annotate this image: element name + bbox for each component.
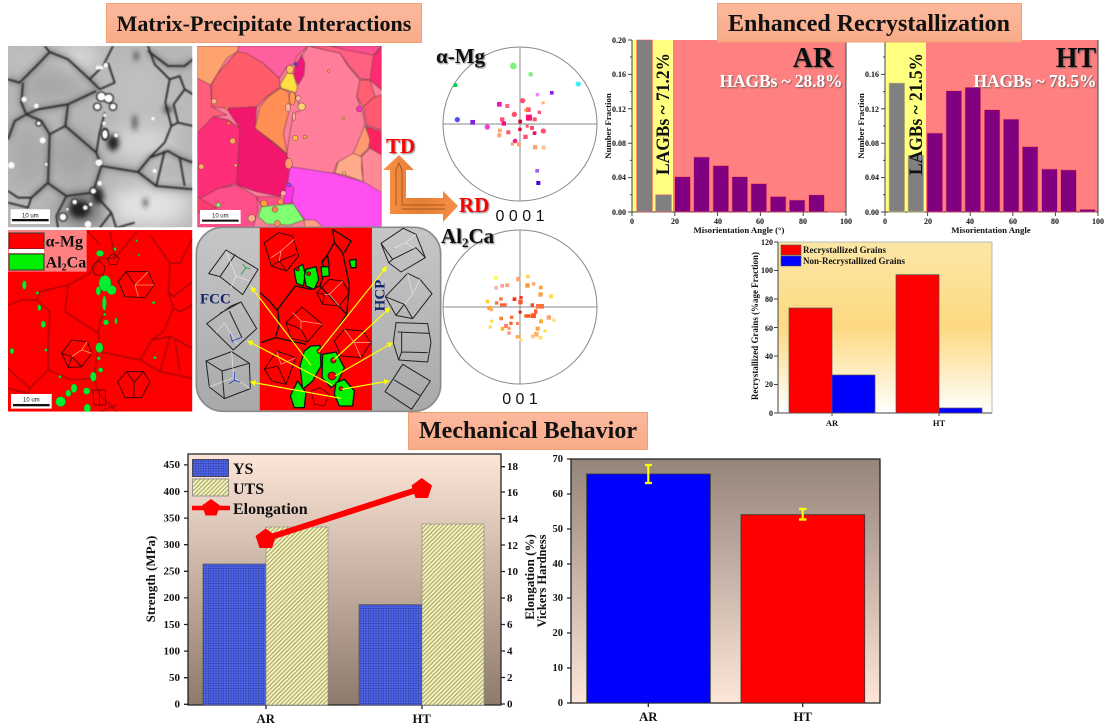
chart: Vickers hardness: HT bbox=[794, 710, 812, 724]
panel: SEM micrograph bbox=[6, 44, 195, 228]
chart: strength and elongation: 400 bbox=[164, 486, 180, 498]
chart: strength and elongation: 250 bbox=[164, 566, 180, 578]
legend: 2 bbox=[62, 262, 67, 273]
chart: strength and elongation: 100 bbox=[164, 646, 180, 658]
chart: misorientation HT: HT bbox=[1056, 43, 1097, 74]
chart: misorientation HT: 60 bbox=[1009, 217, 1017, 226]
panel: IPF orientation map bbox=[197, 46, 382, 227]
legend: Non-Recrystallized Grains bbox=[803, 256, 905, 266]
chart: Vickers hardness: 60 bbox=[552, 489, 563, 500]
title: Mechanical Behavior bbox=[408, 412, 648, 450]
error bars bbox=[645, 465, 806, 520]
chart: recrystallized grains: 40 bbox=[765, 352, 773, 361]
chart: recrystallized grains bbox=[750, 238, 992, 428]
chart: strength and elongation: 10 bbox=[507, 566, 518, 578]
chart: Vickers hardness: 0 bbox=[558, 698, 563, 709]
yellow arrows bbox=[248, 267, 393, 398]
scale bar: 10 um bbox=[23, 398, 40, 404]
chart: Vickers hardness: Vickers Hardness bbox=[535, 534, 549, 627]
chart: misorientation HT: 0.04 bbox=[865, 173, 879, 182]
label: FCC: FCC bbox=[200, 292, 231, 308]
title: Enhanced Recrystallization bbox=[718, 4, 1022, 42]
legend bbox=[8, 230, 87, 273]
TD RD axes arrows: RD bbox=[459, 193, 489, 217]
chart: misorientation AR: 20 bbox=[671, 217, 679, 226]
panel: crystal structure schematic bbox=[196, 227, 441, 411]
chart: misorientation HT: 0.00 bbox=[865, 208, 879, 217]
pole figure: alpha-Mg: 0 0 0 1 bbox=[496, 208, 545, 225]
chart: strength and elongation: 350 bbox=[164, 512, 180, 524]
chart: strength and elongation: 16 bbox=[507, 487, 518, 499]
chart: misorientation AR: AR bbox=[793, 43, 834, 74]
elongation line bbox=[256, 478, 432, 548]
chart: recrystallized grains: AR bbox=[826, 418, 839, 428]
chart: misorientation AR: 0.08 bbox=[612, 139, 626, 148]
chart: recrystallized grains: 20 bbox=[765, 380, 773, 389]
chart: recrystallized grains: Recrystallized Grains (%age Fraction) bbox=[750, 252, 760, 400]
chart: strength and elongation: 50 bbox=[169, 672, 180, 684]
title: Matrix-Precipitate Interactions: Matrix-Precipitate Interactions bbox=[117, 11, 412, 36]
legend: Al bbox=[46, 255, 62, 272]
chart: strength and elongation: HT bbox=[413, 712, 431, 726]
scale bar: 10 um bbox=[22, 213, 39, 219]
chart: strength and elongation: 14 bbox=[507, 514, 518, 526]
chart: Vickers hardness: 30 bbox=[552, 593, 563, 604]
TD RD axes arrows bbox=[383, 134, 489, 222]
crystal wireframes on red bbox=[264, 233, 371, 406]
scale bar bbox=[11, 394, 52, 409]
legend: Recrystallized Grains bbox=[803, 245, 886, 255]
chart: Vickers hardness: 40 bbox=[552, 559, 563, 570]
chart: misorientation AR: 80 bbox=[799, 217, 807, 226]
scale bar bbox=[200, 210, 241, 224]
pole figure: Al2Ca: 2 bbox=[462, 235, 468, 250]
panel: phase map bbox=[8, 230, 192, 413]
title: Matrix-Precipitate Interactions bbox=[106, 4, 422, 42]
chart: misorientation HT: LAGBs ~ 21.5% bbox=[907, 53, 927, 175]
chart: Vickers hardness bbox=[535, 454, 880, 724]
chart: recrystallized grains: HT bbox=[933, 418, 945, 428]
chart: misorientation AR: 0.12 bbox=[612, 105, 626, 114]
chart: misorientation AR: 0.20 bbox=[612, 36, 626, 45]
chart: recrystallized grains: 0 bbox=[769, 409, 773, 418]
chart: misorientation HT: 20 bbox=[924, 217, 932, 226]
chart: misorientation HT: 0.12 bbox=[865, 105, 879, 114]
legend: YS bbox=[233, 461, 254, 478]
chart: strength and elongation: 300 bbox=[164, 539, 180, 551]
pole figure: Al2Ca: Al bbox=[441, 224, 462, 248]
pole figure: alpha-Mg bbox=[436, 44, 597, 225]
chart: misorientation AR: 0.16 bbox=[612, 70, 626, 79]
pole figure: Al2Ca bbox=[441, 224, 597, 408]
chart: strength and elongation: 8 bbox=[507, 592, 513, 604]
chart: misorientation AR bbox=[603, 36, 852, 235]
legend: α-Mg bbox=[46, 233, 83, 250]
chart: misorientation HT: Misorientation Angle bbox=[951, 225, 1031, 235]
chart: recrystallized grains: 120 bbox=[761, 238, 773, 247]
chart: recrystallized grains: 80 bbox=[765, 295, 773, 304]
chart: misorientation HT: 0 bbox=[883, 217, 887, 226]
pole figure: Al2Ca: Ca bbox=[468, 224, 495, 248]
chart: strength and elongation: Elongation (%) bbox=[522, 534, 537, 620]
chart: recrystallized grains: 100 bbox=[761, 266, 773, 275]
title: Enhanced Recrystallization: Enhanced Recrystallization bbox=[728, 11, 1010, 37]
chart: strength and elongation: 12 bbox=[507, 540, 518, 552]
title: Mechanical Behavior: Mechanical Behavior bbox=[419, 418, 637, 444]
chart: misorientation AR: 60 bbox=[756, 217, 764, 226]
pole figure: Al2Ca: 0 0 1 bbox=[502, 391, 538, 408]
chart: misorientation HT: 80 bbox=[1051, 217, 1059, 226]
crystal wireframes on map bbox=[62, 253, 154, 405]
chart: recrystallized grains: 60 bbox=[765, 324, 773, 333]
chart: Vickers hardness: 50 bbox=[552, 524, 563, 535]
chart: strength and elongation: 6 bbox=[507, 619, 513, 631]
chart: misorientation AR: 0.00 bbox=[612, 208, 626, 217]
chart: strength and elongation: Strength (MPa) bbox=[143, 536, 158, 622]
chart: Vickers hardness: 10 bbox=[552, 663, 563, 674]
legend: Elongation bbox=[233, 501, 308, 518]
chart: misorientation HT: HAGBs ~ 78.5% bbox=[974, 71, 1096, 91]
HCP prisms bbox=[381, 228, 432, 409]
legend: Ca bbox=[67, 255, 86, 272]
pole figure: alpha-Mg: α-Mg bbox=[436, 44, 486, 68]
chart: strength and elongation: 200 bbox=[164, 592, 180, 604]
chart: misorientation AR: 0 bbox=[630, 217, 634, 226]
legend: UTS bbox=[233, 481, 264, 498]
chart: misorientation HT bbox=[856, 40, 1104, 235]
chart: misorientation AR: 40 bbox=[714, 217, 722, 226]
chart: strength and elongation: AR bbox=[257, 712, 276, 726]
chart: strength and elongation: 450 bbox=[164, 459, 180, 471]
legend bbox=[781, 245, 905, 266]
chart: strength and elongation: 0 bbox=[507, 698, 513, 710]
chart: misorientation AR: LAGBs ~ 71.2% bbox=[654, 53, 674, 175]
scale bar bbox=[11, 209, 50, 224]
chart: misorientation HT: 0.16 bbox=[865, 70, 879, 79]
chart: strength and elongation bbox=[143, 454, 537, 726]
FCC cubes bbox=[206, 250, 258, 399]
chart: Vickers hardness: AR bbox=[639, 710, 658, 724]
chart: misorientation HT: 0.08 bbox=[865, 139, 879, 148]
chart: misorientation AR: Misorientation Angle (°) bbox=[694, 225, 785, 235]
chart: strength and elongation: 0 bbox=[174, 698, 180, 710]
green precipitates bbox=[290, 259, 356, 408]
chart: strength and elongation: 2 bbox=[507, 672, 513, 684]
legend bbox=[192, 460, 308, 518]
chart: misorientation AR: 0.04 bbox=[612, 173, 626, 182]
chart: misorientation HT: 40 bbox=[966, 217, 974, 226]
chart: misorientation AR: HAGBs ~ 28.8% bbox=[720, 71, 842, 91]
TD RD axes arrows: TD bbox=[386, 134, 415, 158]
chart: strength and elongation: 4 bbox=[507, 646, 513, 658]
chart: Vickers hardness: 70 bbox=[552, 454, 563, 465]
chart: misorientation HT: 100 bbox=[1092, 217, 1104, 226]
chart: strength and elongation: 150 bbox=[164, 619, 180, 631]
chart: misorientation AR: 100 bbox=[840, 217, 852, 226]
chart: Vickers hardness: 20 bbox=[552, 628, 563, 639]
chart: strength and elongation: 18 bbox=[507, 461, 518, 473]
chart: misorientation AR: Number Fraction bbox=[603, 93, 613, 159]
chart: misorientation HT: Number Fraction bbox=[856, 93, 866, 159]
scale bar: 10 um bbox=[212, 213, 229, 219]
label: HCP: HCP bbox=[373, 280, 389, 311]
